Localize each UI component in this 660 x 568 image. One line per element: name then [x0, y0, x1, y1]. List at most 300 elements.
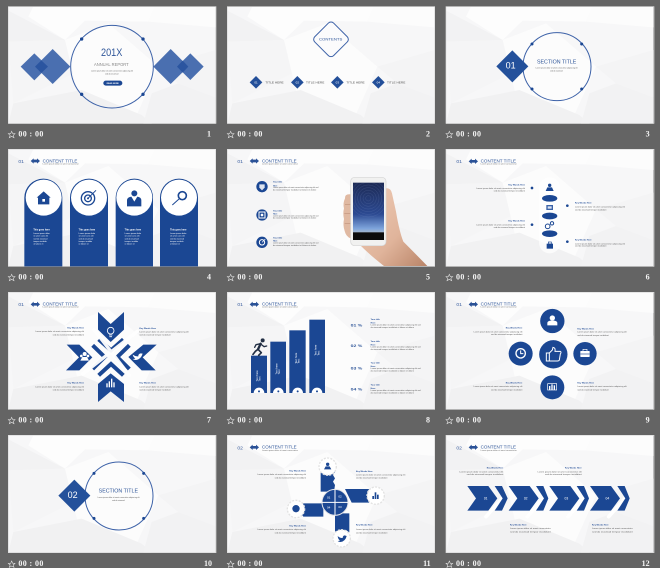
slide 7 footer: 7	[207, 416, 211, 425]
item 2: do eiusmod tempor incididunt ut labore et dolore	[273, 217, 317, 220]
text: bottom right: Lorem ipsum dolor sit amet consectetur adipiscing elit	[577, 385, 627, 388]
text: bottom left: sed do eiusmod tempor incididunt	[494, 226, 525, 229]
column 2: ut labore et	[79, 243, 89, 246]
slide 2: contents	[227, 7, 435, 124]
slide 9 footer	[446, 416, 650, 425]
slide 1: annual report cover	[8, 7, 216, 124]
column 3	[116, 179, 153, 266]
text: step 3	[538, 468, 582, 476]
text: top right: sed do eiusmod tempor incididunt	[356, 476, 388, 479]
central quadrant circle: 03	[338, 505, 342, 509]
icon: briefcase	[547, 242, 553, 249]
item 2: Lorem ipsum dolor sit amet consectetur adipiscing elit sed	[273, 214, 318, 217]
slide 11 footer	[227, 559, 431, 568]
text: bottom right: Lorem ipsum dolor sit amet consectetur adipiscing elit	[139, 385, 189, 388]
column 4: ut labore et	[170, 243, 180, 246]
button	[103, 81, 122, 86]
text: top right	[577, 328, 627, 337]
column 3: sit amet cons elit	[125, 235, 140, 238]
contents item 3: TITLE HERE	[346, 80, 365, 84]
column 1: ut labore et	[33, 243, 44, 246]
text: item 4: Here	[371, 388, 376, 390]
text: top left: Lorem ipsum dolor sit amet consectetur adipiscing elit	[474, 330, 523, 333]
text: item 2: do eiusmod tempor incididunt ut labore et dolore	[371, 348, 415, 351]
text: step 1: sed do eiusmod tempor incididunt	[467, 473, 504, 476]
slide 2 footer: 2	[426, 130, 430, 139]
text: top right: sed do eiusmod tempor incididunt	[575, 208, 607, 211]
text: step 3: Lorem ipsum dolor sit amet consectetur elit	[538, 470, 582, 473]
text: item 1: Here	[371, 322, 376, 324]
section number diamond: 01	[506, 61, 516, 71]
column 4: This goes here	[170, 230, 187, 232]
item 3: Lorem ipsum dolor sit amet consectetur adipiscing elit sed	[273, 242, 318, 245]
item 1: Here	[273, 184, 278, 187]
column 2: This goes here	[79, 230, 96, 232]
slide 5 footer: 5	[426, 273, 430, 282]
slide 5 footer: 00 : 00	[237, 273, 262, 282]
bar captions	[255, 344, 320, 381]
slide 7 footer: 00 : 00	[18, 416, 43, 425]
header	[237, 158, 298, 166]
column 1	[24, 179, 62, 266]
slide 12 footer: 12	[642, 559, 650, 568]
column 4: sit amet cons elit	[170, 235, 185, 238]
text: bottom left	[257, 525, 307, 534]
contents item 4: 04	[377, 80, 380, 84]
bar captions: Text	[277, 369, 281, 374]
text: bottom left: Lorem ipsum dolor sit amet consectetur adipiscing elit	[257, 528, 306, 531]
central quadrant circle	[322, 489, 348, 515]
header: CONTENT TITLE	[481, 301, 517, 307]
text: top left: sed do eiusmod tempor incididunt	[491, 333, 523, 336]
item 3: do eiusmod tempor incididunt ut labore et dolore	[273, 244, 317, 247]
slide 3 footer: 00 : 00	[456, 130, 481, 139]
white capsules	[486, 498, 625, 517]
text: bottom left: Key Words Here	[506, 383, 523, 385]
section ring	[523, 33, 591, 101]
chevron 2	[509, 486, 548, 511]
column 4: Lorem ipsum dolor	[170, 232, 187, 235]
central quadrant circle: 02	[338, 495, 342, 499]
header: Lorem ipsum dolor sit amet consectetur	[43, 163, 79, 166]
column 2: tempor incididu	[79, 240, 92, 243]
text: item 1	[371, 318, 421, 329]
column 1: sit amet cons elit	[33, 235, 49, 238]
text: item 1: Your title	[371, 318, 381, 321]
text: top left: sed do eiusmod tempor incididunt	[494, 190, 525, 193]
bar captions: Text	[297, 359, 301, 364]
header: CONTENT TITLE	[481, 158, 517, 164]
column 1: sed do eiusmod	[33, 238, 47, 240]
text: item 3	[371, 362, 421, 373]
icon: house	[37, 191, 51, 204]
hand holding the phone	[343, 188, 427, 266]
chevron 2: 02	[524, 497, 528, 501]
header: 01	[18, 159, 24, 165]
text: bottom right: Key Words Here	[575, 239, 592, 241]
slide 8 footer: 00 : 00	[237, 416, 262, 425]
slide 2 footer	[227, 130, 430, 139]
text: bottom left: Lorem ipsum dolor sit amet consectetur adipiscing elit	[35, 385, 84, 388]
text: top left	[474, 327, 523, 336]
text: bottom left: sed do eiusmod tempor incididunt	[275, 531, 306, 534]
header: 01	[18, 302, 24, 308]
text: bottom left: Lorem ipsum dolor sit amet consectetur adipiscing elit	[474, 385, 523, 388]
slide 10 footer: 10	[204, 559, 212, 568]
subtitle: ANNUAL REPORT	[94, 62, 129, 67]
text: item 4: do eiusmod tempor incididunt ut labore et dolore	[371, 392, 415, 395]
header	[18, 301, 79, 309]
text: top right: Key Words Here	[577, 328, 595, 330]
button: READ MORE	[107, 82, 119, 85]
gear: right	[367, 487, 384, 504]
header	[456, 158, 517, 166]
slide 12 footer: 00 : 00	[456, 559, 481, 568]
column 1: This goes here	[33, 230, 50, 232]
text: item 2: Lorem ipsum dolor sit amet consectetur adipiscing elit sed	[371, 345, 421, 348]
section number diamond	[58, 480, 90, 512]
text: step 1: Key Words Here	[487, 468, 504, 470]
slide 12 footer	[446, 559, 650, 568]
header: Lorem ipsum dolor sit amet consectetur	[262, 163, 298, 166]
slide 6 footer: 6	[646, 273, 650, 282]
slide 10 footer	[8, 559, 212, 568]
bar captions: Text here	[314, 344, 318, 356]
slide 6: vertical icon chain	[446, 149, 654, 266]
contents item 1	[250, 76, 284, 89]
item 1: do eiusmod tempor incididunt ut labore et dolore	[273, 188, 317, 191]
slide 3: section 01	[446, 7, 654, 124]
icon: runner	[253, 338, 267, 355]
icon: chat	[546, 205, 553, 210]
white chain backdrop	[539, 177, 560, 253]
header: CONTENT TITLE	[43, 301, 78, 307]
text: bottom left: Key Words Here	[67, 383, 85, 385]
icon: people	[80, 352, 89, 361]
contents diamond	[312, 20, 350, 58]
header: 02	[456, 445, 462, 451]
text: bottom left: Lorem ipsum dolor sit amet consectetur adipiscing elit	[476, 223, 525, 226]
text: top left	[257, 470, 307, 479]
text: top right	[356, 471, 406, 479]
slide 6 footer: 00 : 00	[456, 273, 481, 282]
header: 01	[237, 159, 243, 165]
contents item 1: 01	[254, 80, 258, 84]
text: item 1: do eiusmod tempor incididunt ut labore et dolore	[371, 326, 415, 329]
text: item 4: Your title	[371, 384, 381, 387]
text: bottom left: Key Words Here	[508, 221, 526, 223]
column 2: sed do eiusmod	[79, 238, 93, 240]
section description	[98, 496, 140, 502]
text: step 4: Key Words Here	[592, 525, 609, 527]
slide 9: circle cluster	[446, 292, 654, 409]
item 1: Lorem ipsum dolor sit amet consectetur adipiscing elit sed	[273, 186, 318, 189]
icon: lightbulb	[107, 327, 114, 337]
header: CONTENT TITLE	[262, 301, 297, 307]
header: CONTENT TITLE	[43, 158, 78, 164]
text: item 3: Your title	[371, 362, 381, 365]
circle: clock	[509, 342, 533, 366]
item 2: Here	[273, 213, 278, 216]
slide 5 footer	[227, 273, 430, 282]
text: top right: Lorem ipsum dolor sit amet consectetur adipiscing elit	[577, 331, 627, 334]
column 4	[160, 179, 198, 266]
text: item 2: Your title	[371, 340, 381, 343]
bar captions: Text here	[255, 370, 259, 381]
header: CONTENT TITLE	[262, 158, 297, 164]
circle: person	[540, 309, 564, 333]
header: Lorem ipsum dolor sit amet consectetur	[262, 306, 298, 309]
column 3: Lorem ipsum dolor	[125, 232, 141, 235]
column 3: This goes here	[125, 230, 142, 232]
slide 4: four arched columns	[8, 149, 216, 266]
text: top left: Lorem ipsum dolor sit amet consectetur adipiscing elit	[35, 330, 84, 333]
text: top left: Lorem ipsum dolor sit amet consectetur adipiscing elit	[257, 473, 306, 476]
header	[456, 301, 517, 309]
bar captions: Text here	[274, 363, 278, 374]
text: bottom left	[35, 383, 85, 392]
text: step 4	[592, 525, 633, 533]
text: bottom left: Key Words Here	[289, 525, 307, 527]
left diamonds	[21, 49, 70, 84]
contents item 1: TITLE HERE	[265, 80, 284, 84]
section ring	[85, 462, 153, 530]
outer chevrons	[66, 312, 157, 402]
text: step 1	[459, 468, 504, 476]
bar captions: Text	[316, 351, 320, 356]
percent labels: 04 %	[351, 386, 363, 391]
circle: thumbs up	[539, 340, 567, 368]
text: step 2: Lorem ipsum dolor sit amet consectetur	[510, 527, 551, 530]
slide 10 footer: 00 : 00	[18, 559, 43, 568]
text: bottom right: Key Words Here	[139, 383, 157, 385]
year heading: 201X	[101, 47, 123, 59]
text: item 2	[371, 340, 421, 351]
text: top left: sed do eiusmod tempor incididunt	[275, 476, 306, 479]
contents item 2	[291, 76, 325, 89]
text: top right: Key Words Here	[139, 328, 157, 330]
description: Lorem ipsum dolor sit amet consectetur adipiscing elit	[91, 70, 133, 73]
slide 11 footer: 00 : 00	[237, 559, 262, 568]
slide 4 footer	[8, 273, 211, 282]
text: step 2: Key Words Here	[510, 525, 527, 527]
text: bottom right	[139, 383, 189, 392]
text: item 4	[371, 384, 421, 395]
slide 1 footer: 00 : 00	[18, 130, 43, 139]
contents item 4: TITLE HERE	[387, 80, 406, 84]
contents item 3	[331, 76, 365, 89]
slide 3 footer	[446, 130, 650, 139]
text: bottom right: sed do eiusmod tempor incididunt	[575, 245, 607, 248]
header	[237, 301, 298, 309]
ring nodes	[92, 472, 145, 520]
text: top right	[575, 203, 625, 211]
text: bottom left: sed do eiusmod tempor incididunt	[53, 389, 84, 392]
text: bottom right: sed do eiusmod tempor incididunt	[356, 531, 388, 534]
slide 10: section 02	[8, 435, 216, 553]
column 3: sed do eiusmod	[125, 238, 139, 240]
text: step 2: sed do eiusmod tempor incididunt	[510, 530, 551, 533]
phone	[350, 177, 387, 246]
percent labels: 01 %	[351, 323, 363, 328]
percent labels: 03 %	[351, 365, 363, 370]
item 3: Your title	[273, 236, 283, 239]
header: Lorem ipsum dolor sit amet consectetur	[481, 163, 517, 166]
text: bottom right: Lorem ipsum dolor sit amet consectetur adipiscing elit	[356, 528, 406, 531]
column 3: tempor incididu	[125, 240, 138, 243]
text: top left: Key Words Here	[508, 184, 526, 186]
slide 6 footer	[446, 273, 650, 282]
text: bottom right: sed do eiusmod tempor incididunt	[139, 389, 171, 392]
header: Lorem ipsum dolor sit amet consectetur	[43, 306, 79, 309]
section description: sed do eiusmod	[112, 500, 125, 502]
header: 02	[237, 445, 243, 451]
icon: people	[546, 184, 554, 191]
slide 8 footer: 8	[426, 416, 430, 425]
text: item 3: do eiusmod tempor incididunt ut labore et dolore	[371, 370, 415, 373]
contents item 2: 02	[296, 80, 299, 84]
text: item 3: Lorem ipsum dolor sit amet consectetur adipiscing elit sed	[371, 367, 421, 370]
right diamonds	[153, 49, 204, 84]
bar captions: Text	[258, 376, 262, 381]
bar captions: Text here	[294, 352, 298, 364]
header	[456, 445, 517, 452]
item 3	[256, 236, 318, 248]
bar base circles	[254, 388, 322, 393]
icon: bird	[133, 353, 143, 360]
section number diamond	[496, 50, 528, 82]
slide 7: four chevrons cross	[8, 292, 216, 409]
percent labels	[351, 323, 363, 391]
description	[91, 70, 133, 76]
text: step 3: Key Words Here	[565, 468, 582, 470]
slide 11 footer: 11	[423, 559, 431, 568]
slide 8 footer	[227, 416, 430, 425]
chevron 3: 03	[564, 497, 568, 501]
slide 9 footer: 00 : 00	[456, 416, 481, 425]
text: top left: Key Words Here	[289, 470, 307, 472]
gear: bottom	[333, 530, 350, 547]
connector dots	[531, 187, 569, 243]
column 2: sit amet cons elit	[79, 235, 94, 238]
header: 01	[237, 302, 243, 308]
contents item 4	[372, 76, 406, 89]
item 2	[256, 209, 318, 221]
text: top left	[476, 184, 526, 193]
header: Lorem ipsum dolor sit amet consectetur	[481, 306, 517, 309]
chevron 4	[590, 486, 630, 511]
text: step 1: Lorem ipsum dolor sit amet consectetur elit	[459, 470, 504, 473]
text: top right: sed do eiusmod tempor incididunt	[139, 334, 171, 337]
section number diamond: 02	[68, 490, 78, 500]
text: top right	[139, 328, 189, 337]
bar chart	[251, 320, 325, 393]
column 4: tempor incididu	[170, 240, 183, 243]
header: CONTENT TITLE	[481, 445, 517, 451]
chevron 1	[467, 486, 508, 511]
column 4: sed do eiusmod	[170, 238, 184, 240]
slide 11: gear pinwheel	[227, 435, 435, 553]
central quadrant circle: 04	[327, 506, 331, 510]
text: top left	[35, 327, 85, 336]
text: top left: sed do eiusmod tempor incididunt	[53, 333, 84, 336]
column 3: ut labore et	[125, 243, 135, 246]
text: bottom right: Key Words Here	[356, 525, 373, 527]
slide 4 footer: 00 : 00	[18, 273, 43, 282]
item 3: Here	[273, 240, 278, 243]
slide 12: chevron process	[446, 435, 654, 553]
item 2: Your title	[273, 210, 283, 213]
header: Lorem ipsum dolor sit amet consectetur	[262, 449, 298, 452]
text: step 3: sed do eiusmod tempor incididunt	[545, 473, 582, 476]
text: top left: Key Words Here	[67, 327, 85, 329]
slide 9 footer: 9	[646, 416, 650, 425]
text: item 1: Lorem ipsum dolor sit amet consectetur adipiscing elit sed	[371, 323, 421, 326]
slide 4 footer: 4	[207, 273, 211, 282]
central quadrant circle: 01	[327, 496, 331, 500]
contents item 2: TITLE HERE	[306, 80, 325, 84]
text: bottom right: Lorem ipsum dolor sit amet consectetur adipiscing elit	[575, 242, 625, 245]
gear: top	[319, 458, 336, 475]
icon: bars	[106, 379, 115, 387]
slide 8: stepped bar chart	[227, 292, 435, 409]
icon: person	[127, 190, 141, 206]
header: CONTENT TITLE	[262, 445, 297, 451]
section description: sed do eiusmod	[550, 71, 563, 73]
header	[18, 158, 79, 166]
slide 5: phone and hand	[227, 149, 435, 266]
text: step 4: Lorem ipsum dolor sit amet consectetur	[592, 527, 633, 530]
header: 01	[456, 302, 462, 308]
contents item 3: 03	[336, 80, 339, 84]
text: bottom left	[476, 221, 526, 229]
text: step 2	[510, 525, 551, 533]
percent labels: 02 %	[351, 343, 363, 348]
item 1: Your title	[273, 181, 283, 184]
section title: SECTION TITLE	[537, 59, 577, 65]
text: bottom right	[575, 239, 625, 248]
icon: magnifier	[172, 192, 186, 205]
text: item 3: Here	[371, 366, 376, 368]
chevron 4: 04	[605, 497, 609, 501]
header: Lorem ipsum dolor sit amet consectetur	[481, 449, 517, 452]
slide 1 footer	[8, 130, 211, 139]
text: bottom right	[356, 525, 406, 534]
column 2: Lorem ipsum dolor	[79, 232, 95, 235]
separator ellipses	[542, 195, 557, 237]
notched arms	[301, 472, 369, 532]
text: item 2: Here	[371, 344, 376, 346]
description: sed do eiusmod	[105, 74, 118, 76]
white crossing bands	[83, 330, 137, 375]
text: top right: Key Words Here	[356, 471, 373, 473]
bar base marks	[258, 390, 318, 392]
chevron 1: 01	[484, 497, 488, 501]
item 1	[256, 181, 318, 192]
text: top right: Key Words Here	[575, 203, 592, 205]
column 2	[70, 179, 108, 266]
slide 3 footer: 3	[646, 130, 650, 139]
column 1: Lorem ipsum dolor	[33, 232, 50, 235]
inner chevrons	[93, 339, 129, 375]
star trails	[353, 182, 384, 217]
section description: Lorem ipsum dolor sit amet consectetur adipiscing elit	[536, 67, 578, 70]
chevron 3	[549, 486, 589, 511]
ring nodes	[80, 37, 145, 96]
text: top left: Lorem ipsum dolor sit amet consectetur adipiscing elit	[476, 187, 525, 190]
text: item 4: Lorem ipsum dolor sit amet consectetur adipiscing elit sed	[371, 389, 421, 392]
header	[237, 445, 298, 452]
